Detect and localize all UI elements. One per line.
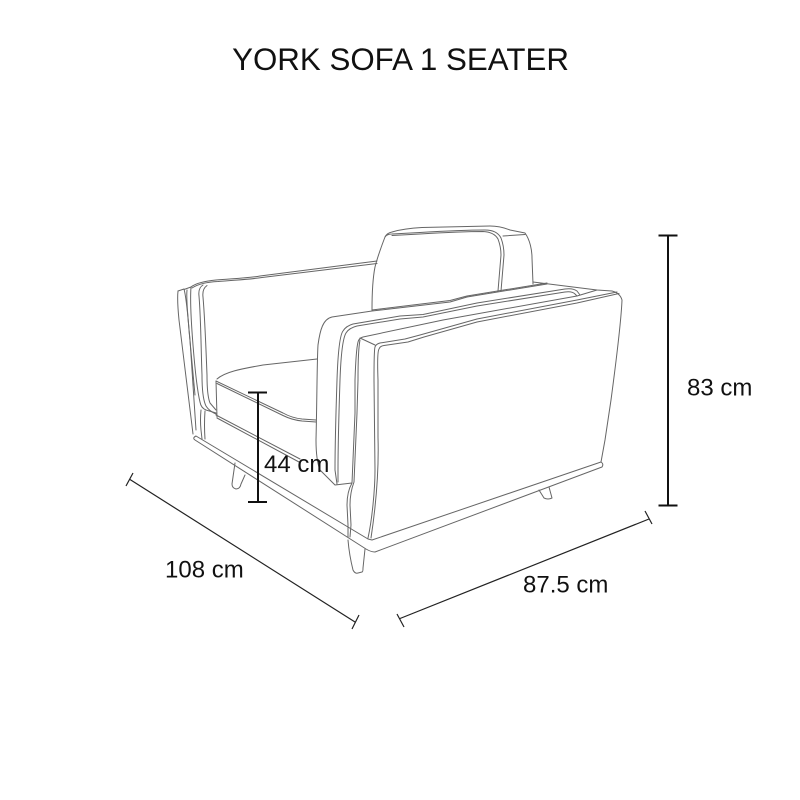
title: YORK SOFA 1 SEATER (232, 42, 569, 77)
dimension: depth 108 cm (126, 473, 359, 629)
base frame (194, 436, 603, 552)
sofa line drawing (178, 226, 622, 573)
left arm and inner back (178, 261, 377, 439)
seat cushion (216, 359, 317, 462)
dimension: seat height 44 cm (248, 392, 329, 502)
dimension: depth 108 cm: 108 cm (165, 556, 244, 584)
dimension: width 87.5 cm: 87.5 cm (523, 572, 608, 598)
dimension: width 87.5 cm (397, 511, 652, 627)
back cushion (372, 226, 533, 310)
sofa legs (232, 463, 552, 573)
dimension: height 83 cm: 83 cm (687, 374, 752, 402)
dimension: height 83 cm (658, 236, 752, 506)
dimension: seat height 44 cm: 44 cm (264, 451, 329, 478)
front arm (316, 282, 622, 538)
